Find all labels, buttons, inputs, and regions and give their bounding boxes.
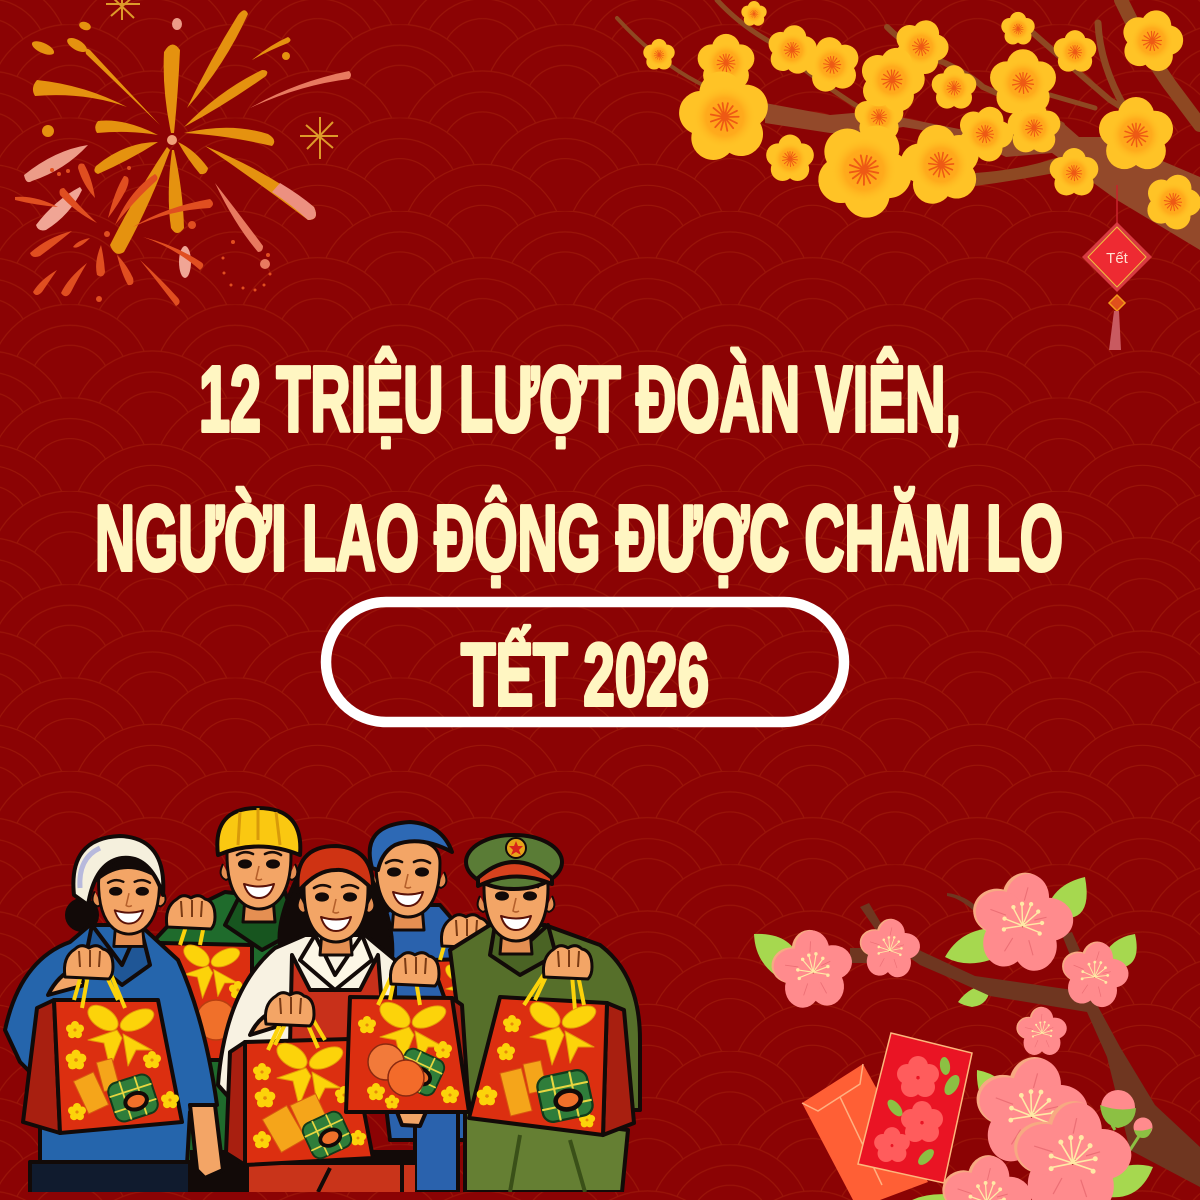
gift bag behind: green shirt worker [160, 896, 252, 1060]
lantern label: Tết [1106, 250, 1129, 267]
gift bag: soldier [469, 946, 634, 1135]
worker in yellow helmet [155, 806, 302, 1160]
icon: pink peach blossom branch [754, 866, 1200, 1200]
shadow under bags [190, 1150, 415, 1192]
pill badge: Tết 2026 [326, 602, 844, 724]
worker in blue cap [365, 822, 470, 1192]
woman in headscarf [5, 836, 223, 1196]
illustration: workers holding Tết gift bags [5, 808, 640, 1196]
icon: yellow apricot blossom branch [617, 0, 1200, 250]
title [95, 347, 1063, 590]
icon: red envelopes [802, 1033, 972, 1200]
gift bag behind: blue shirt worker [436, 913, 489, 997]
soldier [450, 835, 640, 1192]
badge text: TẾT 2026 [461, 625, 709, 724]
gift bag: blue-shirt worker [346, 953, 469, 1126]
gift bag: centre woman [226, 993, 373, 1165]
icon: fireworks [15, 0, 351, 306]
gift bag: left woman [23, 946, 182, 1133]
icon: hanging Tết lantern charm [1082, 185, 1152, 350]
woman in red hat and apron [218, 846, 415, 1196]
